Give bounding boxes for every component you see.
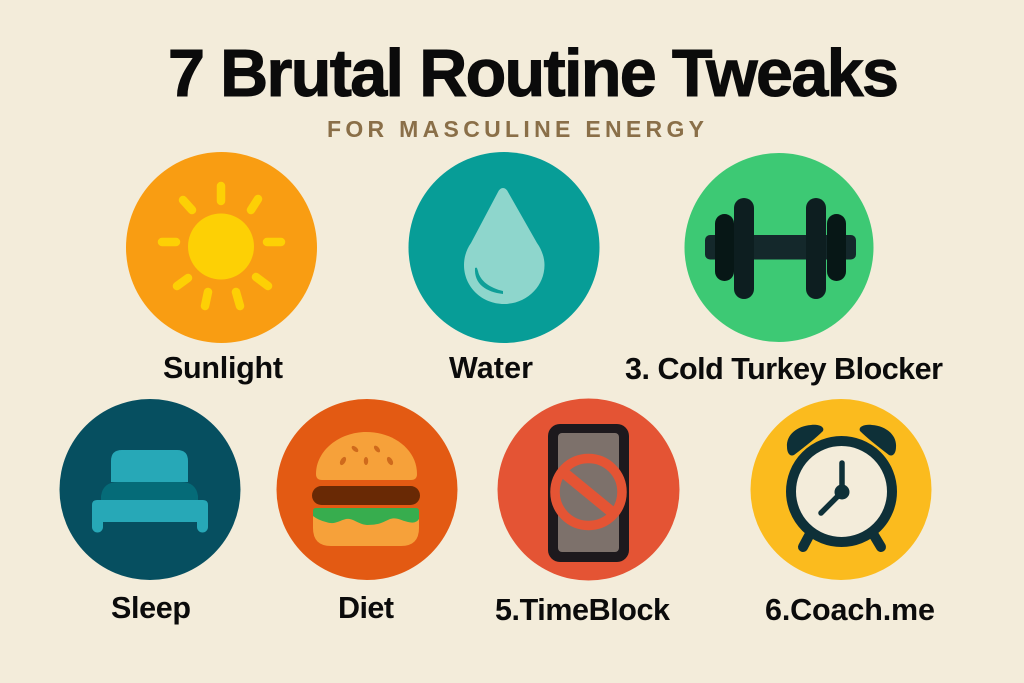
label: water: Water (449, 351, 533, 385)
label: coach.me: 6.Coach.me (765, 593, 935, 627)
label: sunlight: Sunlight (163, 351, 283, 385)
icon: water (408, 152, 600, 343)
icon: burger (276, 399, 458, 580)
label: sleep: Sleep (111, 591, 191, 625)
icon: blocked phone (498, 398, 680, 580)
icon: dumbbell (684, 153, 874, 342)
label: cold turkey blocker: 3. Cold Turkey Blocker (625, 352, 943, 386)
icon: alarm clock (750, 399, 932, 580)
icon: sunlight (126, 152, 317, 343)
label: timeblock: 5.TimeBlock (495, 593, 670, 627)
subtitle: FOR MASCULINE ENERGY (327, 116, 704, 142)
icon: sleep (60, 399, 240, 580)
label: diet: Diet (338, 591, 394, 625)
title: 7 Brutal Routine Tweaks (168, 37, 899, 111)
